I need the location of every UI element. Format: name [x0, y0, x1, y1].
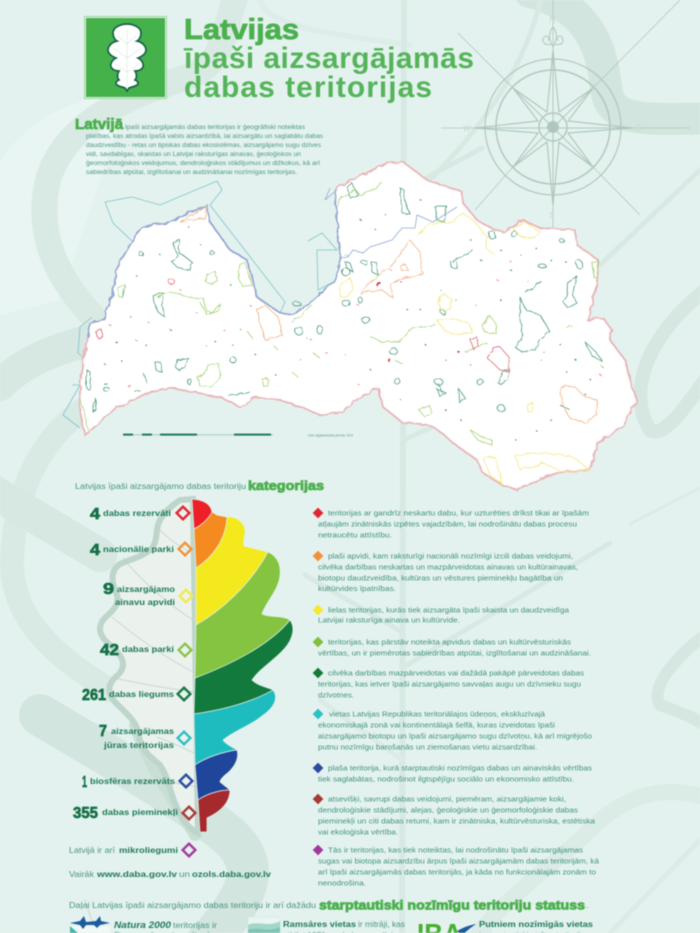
label: mikroliegumi	[69, 844, 195, 856]
international status heading	[69, 898, 588, 912]
icon: Ramsar waves	[248, 917, 280, 933]
leaf: segment nacionālie parki	[194, 512, 227, 568]
label: biosfēras rezervāts: biosfēras rezervāts	[90, 776, 175, 786]
description: dabas liegumi: teritorijas, kas ietver īpaši aizsargājamo savvaļas augu un dzīvnieku sugu	[318, 680, 581, 688]
label: nacionālie parki	[90, 542, 191, 559]
label: dabas liegums	[82, 687, 190, 704]
map: light green parks	[80, 183, 604, 445]
label: aizsargājamas jūras teritorijas: aizsargājamas	[111, 726, 174, 736]
description: jūras teritorijas	[313, 709, 592, 752]
map: biosphere reserve boundary	[325, 188, 457, 258]
title: īpaši aizsargājamās	[183, 42, 474, 75]
intro text block: ģeomorfoloģiskos veidojumus, dendroloģiskos stādījumus un dižkokus, kā arī	[86, 160, 320, 167]
label: aizsargājamas jūras teritorijas: jūras teritorijas	[103, 740, 174, 750]
title: Latvijas	[184, 14, 299, 46]
label: dabas rezervāti	[90, 506, 189, 523]
leaf: segment dabas parki	[195, 552, 290, 678]
description: mikroliegumi	[313, 845, 600, 888]
label: links: un	[179, 870, 190, 879]
Ramsar block	[248, 917, 405, 933]
description: dabas rezervāti: teritorijas ar gandrīz neskartu dabu, kur uzturēties drīkst tikai ar īpašām	[328, 508, 589, 518]
label: mikroliegumi: mikroliegumi	[119, 845, 178, 855]
label: aizsargājamas jūras teritorijas: 7	[99, 723, 107, 740]
Natura 2000 block: Natura 2000	[114, 920, 172, 931]
label: dabas rezervāti: dabas rezervāti	[103, 508, 171, 518]
label: biosfēras rezervāts	[82, 774, 192, 791]
description: jūras teritorijas: aizsargājamo biotopu un īpaši aizsargājamo sugu dzīvotņu, kā arī migrējošo	[318, 732, 592, 740]
description: dabas pieminekļi: pieminekļi un citi dabas retumi, kam ir zinātniska, kultūrvēsturiska, estētiska	[318, 816, 596, 826]
description: dabas parki	[313, 637, 591, 658]
map: red nature reserves	[96, 262, 602, 387]
leaf: segment biosfēras rezervāts	[195, 750, 238, 800]
map: country shape	[80, 162, 637, 490]
international status heading: .	[586, 901, 588, 910]
map of Latvia	[63, 162, 637, 490]
description: dabas liegumi: cilvēka darbības mazpārveidotas vai dažādā pakāpē pārveidotas dabas	[328, 668, 584, 678]
compass rose: N	[549, 15, 556, 25]
description: jūras teritorijas: ekonomiskajā zonā vai kontinentālajā šelfā, kuras izveidotas īpaši	[318, 720, 555, 730]
leaf: segment aizsargājamas jūras teritorijas	[194, 690, 276, 765]
description: dabas parki: vērtības, un ir piemērotas sabiedrības atpūtai, izglītošanai un audzināšanai.	[318, 648, 591, 658]
leaf: segment dabas liegums	[194, 620, 293, 714]
leaf: segment dabas rezervāti	[192, 499, 212, 529]
icon: Natura 2000 birds	[70, 916, 110, 933]
compass rose	[441, 0, 690, 240]
Ramsar block: ir mitrāji, kas	[358, 920, 405, 929]
description: dabas pieminekļi: dendroloģiskie stādījumi, alejas, ģeoloģiskie un ģeomorfoloģiskie dabas	[318, 806, 578, 814]
label: links: Vairāk	[69, 870, 95, 879]
description: nacionālie parki: plaši apvidi, kam raksturīgi nacionāli nozīmīgi izcili dabas veidojumi,	[328, 552, 573, 560]
map: dark green reserves	[86, 183, 603, 440]
label: nacionālie parki: nacionālie parki	[103, 544, 174, 554]
description: nacionālie parki: biotopu daudzveidība, kultūras un vēstures pieminekļu bagātība un	[318, 574, 563, 582]
label: links: ozols.daba.gov.lv	[192, 869, 271, 879]
label: mikroliegumi: Latvijā ir arī	[69, 846, 116, 855]
label: dabas parki: 42	[100, 642, 119, 659]
categories heading: Latvijas īpaši aizsargājamo dabas teritoriju	[75, 482, 246, 491]
description: biosfēras rezervāts	[313, 763, 592, 784]
description: mikroliegumi: sugas vai biotopa aizsardzību ārpus īpaši aizsargājamām dabas teritorijām, kā	[318, 856, 600, 866]
international status heading: Daļai Latvijas īpaši aizsargājamo dabas teritoriju ir arī dažādu	[69, 901, 316, 910]
categories heading	[75, 478, 324, 493]
label: dabas liegums: 261	[82, 687, 106, 704]
label: links	[69, 869, 271, 879]
description: dabas liegumi: dzīvotnes.	[318, 690, 354, 700]
categories heading: kategorijas	[248, 478, 324, 493]
description: mikroliegumi: nenodrošina.	[318, 878, 366, 888]
logo: oak leaf on green square	[84, 16, 166, 98]
label: aizsargājamo ainavu apvidi	[103, 581, 192, 607]
description: aizsargājamo ainavu apvidi: Latvijai raksturīga ainava un kultūrvide.	[318, 616, 460, 624]
label: aizsargājamo ainavu apvidi: aizsargājamo	[117, 584, 175, 594]
intro text block: īpaši aizsargājamās dabas teritorijas ir ģeogrāfiski noteiktas	[125, 124, 305, 131]
description: jūras teritorijas: putnu nozīmīgu barošanās un ziemošanas vietu aizsardzībai.	[318, 742, 537, 752]
description: dabas pieminekļi	[313, 794, 596, 836]
oak leaf chart	[100, 499, 293, 833]
description: dabas parki: teritorijas, kas pārstāv noteikta apvidus dabas un kultūrvēsturiskās	[328, 638, 571, 646]
map: yellow landscape areas	[340, 213, 590, 484]
label: biosfēras rezervāts: 1	[82, 774, 87, 791]
international status heading: starptautiski nozīmīgu teritoriju statuss	[319, 898, 585, 912]
title: dabas teritorijas	[184, 71, 432, 104]
label: aizsargājamo ainavu apvidi: ainavu apvidi	[115, 597, 175, 607]
description: jūras teritorijas: vietas Latvijas Republikas teritoriālajos ūdeņos, ekskluzīvajā	[329, 710, 546, 718]
Natura 2000 block: teritorijas ir	[173, 921, 217, 930]
map: data note: Datu sagatavošanas periods: 2014	[308, 434, 353, 438]
Natura 2000 block	[70, 916, 217, 933]
description: nacionālie parki: kultūrvides īpatnības.	[318, 584, 396, 593]
leaf: left half outline	[100, 499, 198, 833]
description: biosfēras rezervāts: plaša teritorija, kurā starptautiski nozīmīgas dabas un ainaviskās vērtības	[328, 764, 592, 772]
map: marine protected zones	[63, 181, 337, 428]
label: dabas pieminekļi: dabas pieminekļi	[102, 807, 178, 817]
leaf: segment dabas pieminekļi	[198, 790, 230, 832]
intro text block: sabiedrības atpūtai, izglītošanai un audzināšanai nozīmīgas teritorijas.	[86, 169, 297, 176]
intro text block: vidi, savdabīgas, skaistas un Latvijai raksturīgas ainavas, ģeoloģiskos un	[86, 151, 302, 158]
description: dabas liegumi	[313, 668, 584, 700]
description: dabas rezervāti	[313, 508, 589, 540]
category labels with diamonds	[69, 506, 271, 879]
description: nacionālie parki	[313, 551, 578, 593]
label: aizsargājamo ainavu apvidi: 9	[103, 581, 114, 598]
map: scale bar	[123, 434, 273, 436]
compass rose: E	[636, 124, 642, 133]
description: dabas pieminekļi: vai ekoloģiska vērtība.	[318, 828, 398, 836]
label: dabas pieminekļi: 355	[73, 805, 98, 822]
intro text block: daudzveidību - retas un tipiskas dabas ekosistēmas, aizsargājamo sugu dzīves	[86, 142, 321, 149]
intro text block: Latvijā	[75, 116, 124, 133]
label: aizsargājamas jūras teritorijas	[99, 723, 190, 750]
description: dabas rezervāti: atļaujām zinātniskās izpētes vajadzībām, lai nodrošinātu dabas procesu	[318, 520, 577, 528]
intro text block: platības, kas atrodas īpašā valsts aizsardzībā, lai aizsargātu un saglabātu dabas	[86, 133, 323, 140]
label: dabas parki: dabas parki	[122, 644, 174, 654]
compass rose: W	[463, 124, 472, 133]
label: dabas rezervāti: 4	[90, 506, 100, 523]
description: nacionālie parki: cilvēka darbības neskartas un mazpārveidotas ainavas un kultūrainavas,	[318, 562, 578, 572]
map: orange national parks	[180, 206, 597, 423]
intro text block	[75, 116, 323, 176]
compass rose: S	[549, 211, 555, 220]
label: nacionālie parki: 4	[90, 542, 100, 559]
description: mikroliegumi: Tās ir teritorijas, kas tiek noteiktas, lai nodrošinātu īpaši aizsargājamas	[328, 846, 583, 854]
label: dabas liegums: dabas liegums	[109, 689, 174, 699]
label: dabas parki	[100, 642, 191, 659]
leaf: veins	[112, 530, 197, 787]
description: biosfēras rezervāts: tiek saglabātas, nodrošinot ilgtspējīgu sociālo un ekonomisko attīstību.	[318, 774, 574, 784]
description: aizsargājamo ainavu apvidi	[313, 605, 570, 624]
description: aizsargājamo ainavu apvidi: lielas teritorijas, kurās tiek aizsargāta īpaši skaista un daudzveidīga	[328, 606, 570, 614]
description: dabas pieminekļi: atsevišķi, savrupi dabas veidojumi, piemēram, aizsargājamie koki,	[328, 794, 566, 804]
IBA block: Putniem nozīmīgās vietas	[479, 919, 593, 929]
leaf: segment aizsargājamo ainavu apvidi	[196, 517, 268, 625]
title	[183, 14, 474, 104]
label: dabas pieminekļi	[73, 805, 195, 822]
description: mikroliegumi: arī īpaši aizsargājamās dabas teritorijās, ja kāda no funkcionālajām zonām to	[318, 868, 596, 876]
description: dabas rezervāti: netraucētu attīstību.	[318, 530, 392, 540]
Ramsar block: Ramsāres vietas	[283, 919, 356, 929]
category descriptions	[313, 508, 600, 888]
label: links: www.daba.gov.lv	[96, 869, 177, 879]
IBA block	[417, 919, 593, 933]
